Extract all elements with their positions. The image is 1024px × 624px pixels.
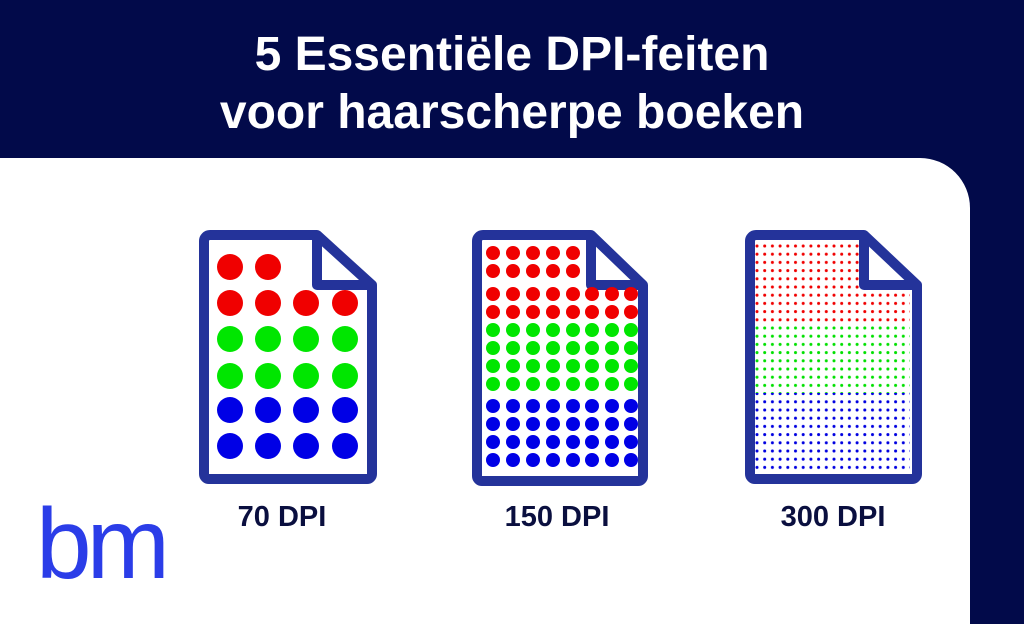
title: 5 Essentiële DPI-feiten	[255, 28, 769, 81]
document: 150 DPI	[477, 235, 643, 481]
document: 70 DPI	[204, 235, 372, 479]
title: voor haarscherpe boeken	[220, 86, 804, 139]
document: 300 DPI	[750, 235, 917, 479]
logo: bm: bm	[36, 488, 165, 600]
white panel	[0, 158, 970, 624]
label: 150 DPI: 150 DPI	[505, 501, 609, 533]
label: 300 DPI: 300 DPI	[781, 501, 885, 533]
label: 70 DPI: 70 DPI	[238, 501, 326, 533]
title	[220, 28, 804, 139]
